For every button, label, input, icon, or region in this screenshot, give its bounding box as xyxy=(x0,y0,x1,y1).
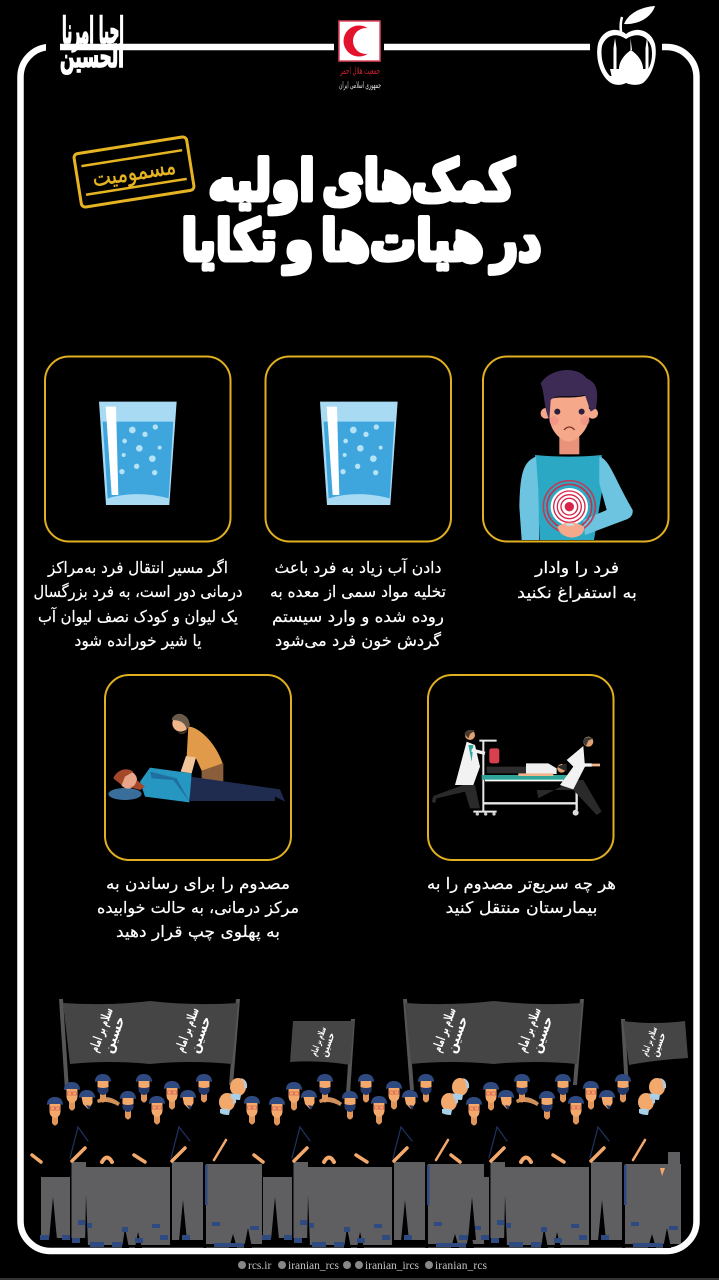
text: احیا امرنا xyxy=(62,11,124,52)
logo: red crescent: جمعیت هلال احمر xyxy=(339,66,380,77)
icon: glass of water xyxy=(99,402,177,505)
footer social handles: iranian_ircs xyxy=(365,1260,420,1272)
flags: حسین xyxy=(650,1031,669,1059)
text: به پهلوی چپ قرار دهید xyxy=(116,922,280,942)
icon: glass of water xyxy=(320,402,398,505)
text: هر چه سریع‌تر مصدوم را به xyxy=(427,874,616,894)
logo: calligraphy xyxy=(46,11,124,75)
text: یک لیوان و کودک نصف لیوان آب xyxy=(38,607,238,627)
text: اگر مسیر انتقال فرد به‌مراکز xyxy=(47,558,228,578)
icon: boy with stomach pain xyxy=(519,370,633,540)
flags xyxy=(59,999,688,1094)
flags: سلام بر امام xyxy=(430,1006,460,1054)
flags: حسین xyxy=(101,1014,129,1055)
logo: red crescent: جمهوری اسلامی ایران xyxy=(339,81,381,91)
text xyxy=(97,874,299,942)
tag: poisoning: مسمومیت xyxy=(90,152,178,192)
panel: transfer to hospital xyxy=(427,675,616,918)
footer social handles xyxy=(238,1260,488,1272)
title: کمک‌های اولیه xyxy=(208,149,515,214)
panel: do not induce vomiting xyxy=(483,356,668,603)
text: روده شده و وارد سیستم xyxy=(272,607,444,627)
flags: حسین xyxy=(319,1031,338,1059)
flags: حسین xyxy=(187,1014,215,1055)
panel: too much water warning xyxy=(266,356,451,651)
text: مرکز درمانی، به حالت خوابیده xyxy=(97,898,299,918)
icon: stretcher and doctors xyxy=(432,730,602,816)
crowd of mourners xyxy=(32,1074,681,1248)
tag: poisoning xyxy=(73,136,195,208)
icon: person on left side xyxy=(108,714,285,802)
flags: سلام بر امام xyxy=(87,1006,117,1054)
flags: حسین xyxy=(444,1014,472,1055)
text: درمانی دور است، به فرد بزرگسال xyxy=(34,582,242,602)
text: بیمارستان منتقل کنید xyxy=(446,898,598,918)
title xyxy=(182,149,542,274)
panel: drink water if far from hospital xyxy=(34,356,242,651)
title: در هیات‌ها و تکایا xyxy=(182,209,542,274)
text xyxy=(517,558,637,603)
text: مصدوم را برای رساندن به xyxy=(106,874,290,894)
text: تخلیه مواد سمی از معده به xyxy=(270,582,446,602)
footer social handles: iranian_rcs xyxy=(288,1260,340,1272)
panel: recovery position xyxy=(97,675,299,942)
text xyxy=(427,874,616,918)
logo: apple xyxy=(590,6,662,85)
text: یا شیر خورانده شود xyxy=(74,631,202,651)
flags: سلام بر امام xyxy=(640,1026,660,1057)
text: فرد را وادار xyxy=(534,558,619,578)
text: دادن آب زیاد به فرد باعث xyxy=(274,558,442,578)
logo: red crescent xyxy=(334,18,384,92)
text: گردش خون فرد می‌شود xyxy=(275,631,441,651)
text xyxy=(270,558,446,651)
flags: سلام بر امام xyxy=(515,1006,545,1054)
text xyxy=(34,558,242,651)
text: به استفراغ نکنید xyxy=(517,583,637,603)
footer social handles: iranian_rcs xyxy=(435,1260,488,1272)
flags: سلام بر امام xyxy=(309,1026,329,1057)
footer social handles: rcs.ir xyxy=(248,1260,271,1272)
flags: حسین xyxy=(529,1014,557,1055)
flags: سلام بر امام xyxy=(173,1006,203,1054)
logo: calligraphy: الحسین xyxy=(60,40,124,75)
